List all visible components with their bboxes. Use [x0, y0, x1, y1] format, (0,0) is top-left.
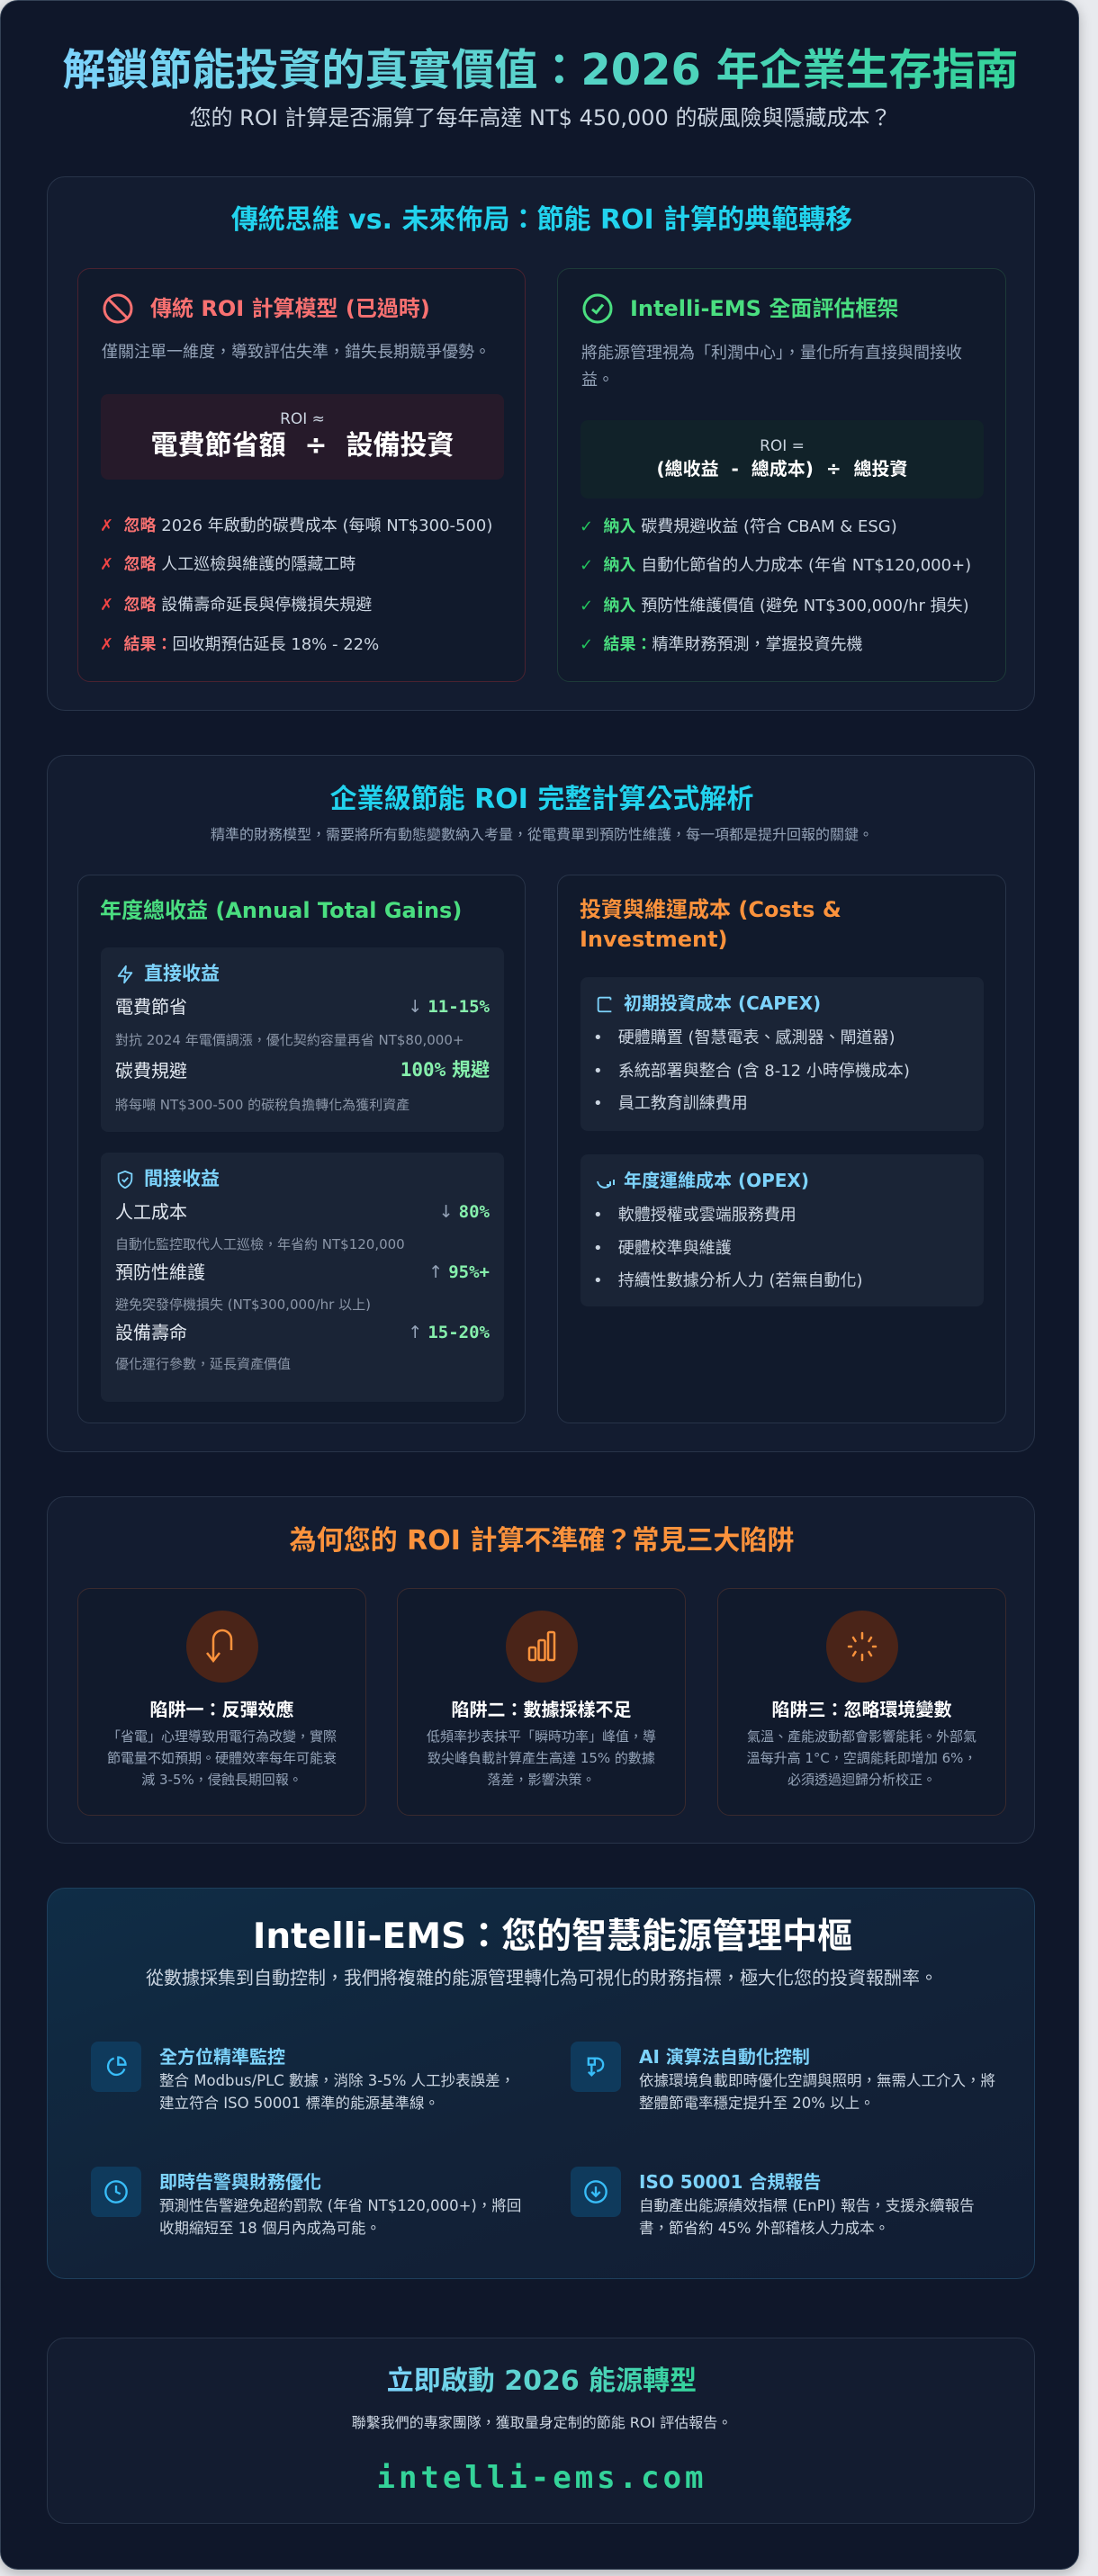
feature: ISO report: ISO 50001 合規報告 — [639, 2171, 821, 2193]
panel: annual gains — [77, 875, 526, 1423]
panel: Intelli-EMS hub — [47, 1888, 1035, 2279]
icon: refresh — [597, 1180, 615, 1189]
box: indirect gains: 優化運行參數，延長資產價值 — [115, 1356, 291, 1372]
card: insufficient sampling — [397, 1588, 686, 1816]
heading: 傳統思維 vs. 未來佈局：節能 ROI 計算的典範轉移 — [231, 204, 852, 236]
feature: ISO report: 自動產出能源績效指標 (EnPI) 報告，支援永續報告 — [639, 2197, 975, 2214]
box: direct gains: 直接收益 — [144, 963, 220, 984]
icon: arrow control — [571, 2042, 621, 2092]
box: CAPEX: • 硬體購置 (智慧電表、感測器、閘道器) — [593, 1028, 896, 1047]
box: OPEX — [580, 1154, 984, 1306]
feature: AI control: 依據環境負載即時優化空調與照明，無需人工介入，將 — [639, 2072, 995, 2089]
URL: intelli-ems.com — [376, 2460, 707, 2496]
column title: 投資與維運成本 (Costs & Investment) — [580, 897, 842, 952]
subtitle: 您的 ROI 計算是否漏算了每年高達 NT$ 450,000 的碳風險與隱藏成本？ — [190, 105, 891, 130]
icon: clock — [91, 2167, 141, 2217]
subheading: 精準的財務模型，需要將所有動態變數納入考量，從電費單到預防性維護，每一項都是提升回報的關鍵。 — [211, 826, 873, 843]
list: included items: ✓ 納入 自動化節省的人力成本 (年省 NT$120,000+) — [580, 556, 971, 575]
panel: call to action — [47, 2338, 1035, 2524]
box: indirect gains: 預防性維護 — [115, 1261, 205, 1283]
feature: alerts: 即時告警與財務優化 — [159, 2171, 321, 2193]
box: indirect gains — [101, 1153, 504, 1402]
description: 將能源管理視為「利潤中心」，量化所有直接與間接收益。 — [581, 344, 962, 390]
icon: rebound arrow — [186, 1611, 258, 1683]
box: direct gains: 將每噸 NT$300-500 的碳稅負擔轉化為獲利資產 — [115, 1097, 410, 1113]
list: ignored items: ✗ 忽略 設備壽命延長與停機損失規避 — [100, 596, 372, 615]
card title: 傳統 ROI 計算模型 (已過時) — [150, 296, 430, 321]
icon: prohibited — [103, 293, 133, 324]
icon: shield — [117, 1170, 133, 1189]
feature: AI control: 整體節電率穩定提升至 20% 以上。 — [639, 2095, 875, 2112]
card: environmental variables: 氣溫、產能波動都會影響能耗。外部氣溫每升高 1°C，空調能耗即增加 6%，必須透過迴歸分析校正。 — [747, 1728, 976, 1788]
box: OPEX: 年度運維成本 (OPEX) — [624, 1170, 809, 1191]
panel: costs & investment — [557, 875, 1006, 1423]
feature: AI control: AI 演算法自動化控制 — [639, 2046, 810, 2068]
heading: 企業級節能 ROI 完整計算公式解析 — [330, 784, 753, 815]
icon: loader — [826, 1611, 898, 1683]
panel: Intelli-EMS framework — [557, 268, 1006, 682]
panel: traditional model — [77, 268, 526, 682]
card: insufficient sampling: 低頻率抄表抹平「瞬時功率」峰值，導致尖峰負載計算產生高達 15% 的數據落差，影響決策。 — [427, 1728, 656, 1788]
card: rebound effect: 陷阱一：反彈效應 — [149, 1699, 293, 1720]
feature: monitoring: 建立符合 ISO 50001 標準的能源基準線。 — [159, 2095, 439, 2112]
list: ignored items — [100, 516, 492, 654]
icon: wallet — [598, 997, 612, 1013]
card: environmental variables — [717, 1588, 1006, 1816]
CTA heading: 立即啟動 2026 能源轉型 — [387, 2365, 697, 2397]
feature: alerts: 預測性告警避免超約罰款 (年省 NT$120,000+)，將回 — [159, 2197, 521, 2214]
box: direct gains — [101, 947, 504, 1132]
feature: monitoring — [91, 2042, 515, 2112]
feature: ISO report — [571, 2167, 975, 2237]
icon: bar chart — [506, 1611, 578, 1683]
list: ignored items: ✗ 忽略 2026 年啟動的碳費成本 (每噸 NT$300-500) — [100, 516, 492, 535]
card: rebound effect — [77, 1588, 366, 1816]
formula box — [101, 394, 504, 480]
card title: Intelli-EMS 全面評估框架 — [630, 296, 898, 321]
feature: alerts — [91, 2167, 521, 2237]
feature: monitoring: 整合 Modbus/PLC 數據，消除 3-5% 人工抄表誤差， — [159, 2072, 515, 2089]
feature: alerts: 收期縮短至 18 個月內成為可能。 — [159, 2220, 381, 2237]
feature: ISO report: 書，節省約 45% 外部稽核人力成本。 — [639, 2220, 889, 2237]
feature: monitoring: 全方位精準監控 — [159, 2046, 285, 2068]
card: environmental variables: 陷阱三：忽略環境變數 — [772, 1699, 952, 1720]
box: direct gains: 對抗 2024 年電價調漲，優化契約容量再省 NT$80,000+ — [115, 1032, 464, 1048]
box: direct gains: 100% 規避 — [400, 1059, 490, 1081]
formula box: ROI = — [760, 437, 805, 455]
list: included items — [580, 517, 971, 654]
box: indirect gains: ↑ 95%+ — [428, 1262, 490, 1282]
box: indirect gains: 自動化監控取代人工巡檢，年省約 NT$120,000 — [115, 1236, 405, 1252]
formula box: (總收益 - 總成本) ÷ 總投資 — [656, 458, 908, 480]
list: included items: ✓ 納入 預防性維護價值 (避免 NT$300,000/hr 損失) — [580, 597, 969, 615]
formula box: ROI ≈ — [280, 410, 325, 428]
panel: paradigm shift — [47, 176, 1035, 711]
box: OPEX: • 硬體校準與維護 — [593, 1239, 732, 1258]
list: ignored items: ✗ 忽略 人工巡檢與維護的隱藏工時 — [100, 555, 356, 574]
box: direct gains: 電費節省 — [115, 996, 187, 1018]
icon: lightning — [117, 965, 133, 984]
title: 解鎖節能投資的真實價值：2026 年企業生存指南 — [62, 45, 1019, 95]
box: CAPEX: • 員工教育訓練費用 — [593, 1094, 748, 1113]
box: indirect gains: ↑ 15-20% — [408, 1323, 490, 1342]
formula box: 電費節省額 ÷ 設備投資 — [151, 430, 454, 462]
icon: download circle — [571, 2167, 621, 2217]
description: 僅關注單一維度，導致評估失準，錯失長期競爭優勢。 — [102, 343, 490, 362]
icon: pie — [91, 2042, 141, 2092]
feature: AI control — [571, 2042, 995, 2112]
box: CAPEX: • 系統部署與整合 (含 8-12 小時停機成本) — [593, 1062, 910, 1081]
box: CAPEX: 初期投資成本 (CAPEX) — [624, 992, 821, 1014]
heading: Intelli-EMS：您的智慧能源管理中樞 — [253, 1916, 852, 1957]
box: direct gains: 碳費規避 — [115, 1060, 187, 1082]
card: rebound effect: 「省電」心理導致用電行為改變，實際節電量不如預期。硬體效率每年可能衰減 3-5%，侵蝕長期回報。 — [107, 1728, 337, 1788]
card: insufficient sampling: 陷阱二：數據採樣不足 — [452, 1699, 632, 1720]
panel: ROI formula breakdown — [47, 755, 1035, 1452]
column title: 年度總收益 (Annual Total Gains) — [100, 898, 462, 923]
list: included items: ✓ 納入 碳費規避收益 (符合 CBAM & ESG) — [580, 517, 897, 536]
list: ignored items: ✗ 結果：回收期預估延長 18% - 22% — [100, 635, 379, 654]
formula box — [580, 420, 984, 498]
box: OPEX: • 持續性數據分析人力 (若無自動化) — [593, 1271, 863, 1290]
box: direct gains: ↓ 11-15% — [408, 997, 490, 1017]
list: included items: ✓ 結果：精準財務預測，掌握投資先機 — [580, 635, 863, 654]
panel: three pitfalls — [47, 1496, 1035, 1844]
box: indirect gains: 間接收益 — [144, 1168, 220, 1189]
icon: check circle — [583, 293, 612, 324]
box: CAPEX — [580, 977, 984, 1131]
box: indirect gains: 設備壽命 — [115, 1322, 187, 1343]
box: indirect gains: 避免突發停機損失 (NT$300,000/hr 以上) — [115, 1297, 371, 1313]
box: indirect gains: ↓ 80% — [439, 1202, 490, 1222]
subheading: 從數據採集到自動控制，我們將複雜的能源管理轉化為可視化的財務指標，極大化您的投資報酬率。 — [146, 1967, 938, 1988]
box: indirect gains: 人工成本 — [115, 1201, 187, 1223]
box: OPEX: • 軟體授權或雲端服務費用 — [593, 1206, 796, 1225]
heading: 為何您的 ROI 計算不準確？常見三大陷阱 — [290, 1525, 794, 1557]
CTA text: 聯繫我們的專家團隊，獲取量身定制的節能 ROI 評估報告。 — [352, 2414, 732, 2431]
